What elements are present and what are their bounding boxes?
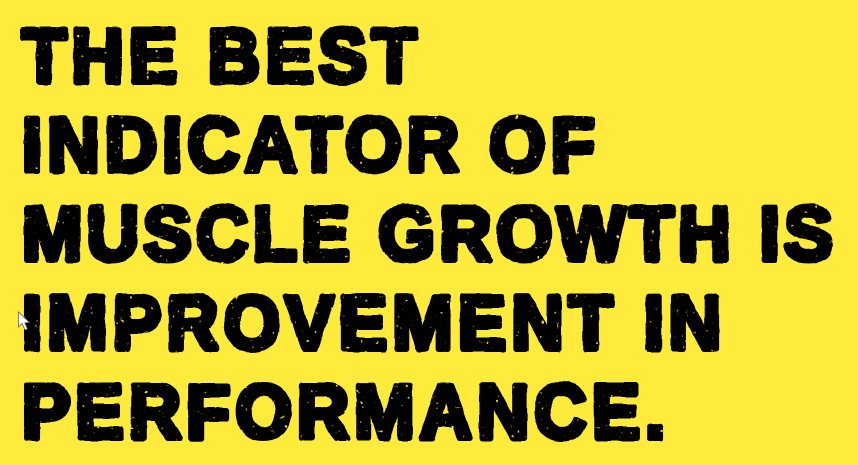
line 2: INDICATOR OF <box>22 102 595 187</box>
line 1: THE BEST <box>22 13 416 98</box>
line 5: PERFORMANCE. <box>22 369 665 454</box>
line 3: MUSCLE GROWTH IS <box>22 191 832 276</box>
line 4: IMPROVEMENT IN <box>22 280 721 365</box>
icon: mouse cursor <box>18 312 30 330</box>
